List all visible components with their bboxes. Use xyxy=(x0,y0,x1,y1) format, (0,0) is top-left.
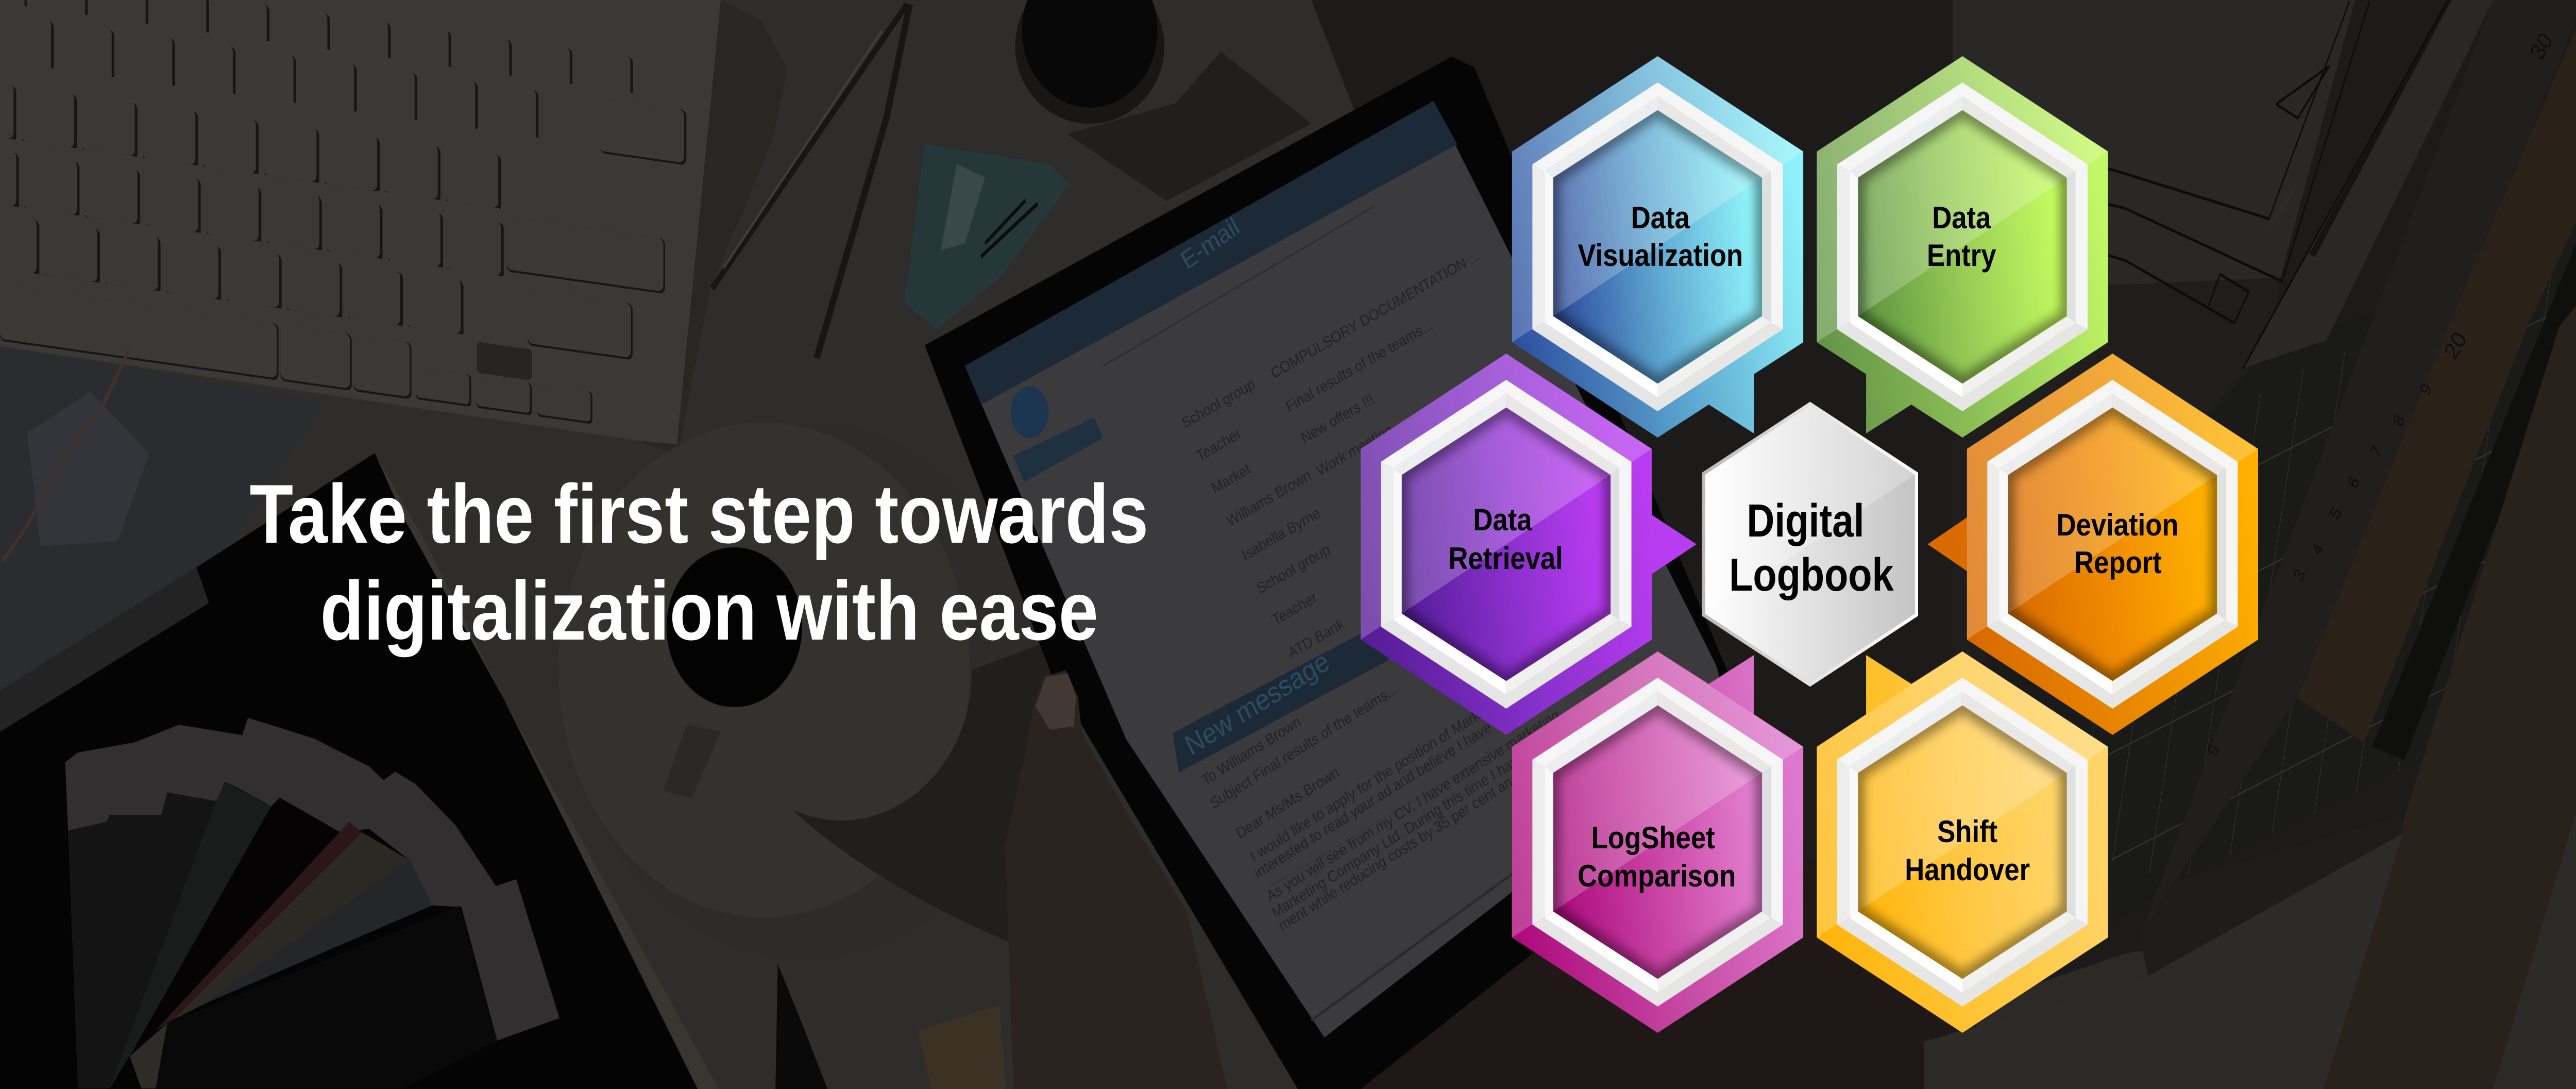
panel: logsheet comparison xyxy=(1512,651,1803,1033)
ruler numbers: 6 xyxy=(2344,473,2363,492)
hexagon body with tail xyxy=(1512,651,1803,1033)
inner shading xyxy=(1402,407,1611,681)
label xyxy=(1448,502,1563,576)
inner shading xyxy=(1553,705,1762,979)
label xyxy=(1578,200,1743,273)
tablet text: message body: I would like to apply for the position of Marketing Manager xyxy=(1247,658,1558,865)
gloss xyxy=(1705,406,1915,614)
inner face xyxy=(1858,110,2067,383)
tablet text: message body: As you will see from my CV, I have extensive marketing xyxy=(1264,706,1562,905)
tablet text: inbox rows: Teacher xyxy=(1194,424,1244,465)
gloss xyxy=(1817,651,2108,937)
ruler numbers: 20 xyxy=(2440,327,2471,364)
tablet text: message body: Subject Final results of the teams... xyxy=(1207,680,1400,812)
tablet text: inbox rows: School group xyxy=(1254,540,1332,597)
compass tool xyxy=(712,4,910,358)
tablet text: inbox rows: School group xyxy=(1179,375,1257,432)
crumpled paper xyxy=(904,144,1070,329)
ruler numbers: 8 xyxy=(2389,411,2409,430)
label: Visualization xyxy=(1578,238,1743,273)
tablet text: inbox rows: Market xyxy=(1209,460,1253,497)
label: Data xyxy=(1932,200,1991,235)
centre label: Logbook xyxy=(1729,548,1894,600)
tablet text: inbox rows: Teacher xyxy=(1269,588,1319,629)
face xyxy=(1705,406,1915,683)
black pot base xyxy=(1015,0,1311,201)
ruler numbers xyxy=(2204,28,2557,760)
label: Handover xyxy=(1905,852,2030,887)
ruler numbers: 9 xyxy=(2204,741,2223,760)
label: Report xyxy=(2074,545,2162,580)
hexagon body with arrow xyxy=(1927,354,2258,735)
white ring xyxy=(1532,678,1783,1007)
panel: digital logbook centre xyxy=(1702,402,1918,686)
label xyxy=(1927,200,1996,273)
ruler numbers: 30 xyxy=(2526,28,2557,65)
tablet text: inbox rows: COMPULSORY DOCUMENTATION ... xyxy=(1268,246,1482,382)
hexagon body with tail xyxy=(1512,56,1803,438)
inner face xyxy=(1858,705,2067,979)
tablet text: message body: Marketing Company Ltd. During this time I have improved xyxy=(1269,715,1579,922)
tablet text: inbox rows xyxy=(1179,246,1482,662)
tablet text: inbox rows: Williams Brown xyxy=(1224,466,1313,530)
tablet text: inbox rows: Work meeting xyxy=(1314,421,1395,479)
hexagon body with tail xyxy=(1817,651,2108,1033)
tablet text: message body xyxy=(1199,658,1579,934)
label xyxy=(1905,814,2030,887)
coffee cup and saucer xyxy=(558,423,1130,979)
inner shading xyxy=(2008,407,2217,681)
white ring xyxy=(1837,82,2088,411)
panel: data visualization xyxy=(1512,56,1803,438)
hand on tablet xyxy=(1005,670,1227,1089)
tablet text: message body: ment while reducing costs by 35 per cent and improved xyxy=(1276,735,1573,934)
gloss xyxy=(1512,56,1803,342)
centre label xyxy=(1729,494,1894,600)
ruler numbers: 7 xyxy=(2367,442,2386,461)
ruler numbers: 5 xyxy=(2326,504,2345,523)
plant paper xyxy=(0,346,324,732)
white ring xyxy=(1987,380,2238,709)
tablet text: inbox rows: Final results of the teams... xyxy=(1283,315,1435,415)
white ring xyxy=(1532,82,1783,411)
gloss xyxy=(1361,354,1652,640)
title: digitalization with ease xyxy=(320,564,1098,658)
title: Take the first step towards xyxy=(249,467,1148,561)
black notebook and leather strip xyxy=(0,453,719,1089)
label: Retrieval xyxy=(1448,541,1563,576)
tablet text: inbox rows: Isabella Byrne xyxy=(1239,504,1323,564)
label xyxy=(2057,508,2179,580)
tablet text: message body: To Williams Brown xyxy=(1199,712,1303,789)
ruler numbers: 4 xyxy=(2308,540,2327,559)
label xyxy=(1578,820,1736,893)
label: Shift xyxy=(1937,814,1997,849)
label: Deviation xyxy=(2057,508,2179,542)
white ring xyxy=(1837,678,2088,1007)
label: Data xyxy=(1631,200,1690,235)
label: Entry xyxy=(1927,238,1996,273)
bevel xyxy=(1702,402,1918,686)
inner face xyxy=(1553,705,1762,979)
tablet text: e-mail header: E-mail xyxy=(1176,211,1244,275)
tablet text: inbox rows: ATD Bank xyxy=(1285,614,1347,662)
inner shading xyxy=(1553,110,1762,383)
title xyxy=(249,467,1148,658)
colour swatches fan xyxy=(65,718,560,1088)
panel: data entry xyxy=(1817,56,2108,438)
inner face xyxy=(1402,407,1611,681)
gloss xyxy=(1967,354,2258,640)
label: LogSheet xyxy=(1591,820,1715,855)
inner shading xyxy=(1858,705,2067,979)
inner shading xyxy=(1858,110,2067,383)
ruler numbers: 9 xyxy=(2416,380,2435,399)
right-side papers, cutting mat, rulers xyxy=(1924,0,2576,1089)
tablet text: message body: Dear Ms/Ms Brown xyxy=(1233,763,1342,842)
gloss xyxy=(1817,56,2108,342)
hand holding the tablet (behind) xyxy=(1357,845,2283,1089)
label: Comparison xyxy=(1578,859,1736,893)
panel: data retrieval xyxy=(1361,354,1697,735)
tablet text: new message bar: New message xyxy=(1180,645,1334,762)
tablet xyxy=(925,57,1768,1089)
hexagon body with tail xyxy=(1817,56,2108,438)
keyboard xyxy=(0,0,787,454)
wooden ruler and pen on the desk xyxy=(775,964,1006,1089)
hexagon body with arrow xyxy=(1361,354,1697,735)
white ring xyxy=(1381,380,1632,709)
gloss xyxy=(1512,651,1803,937)
ruler numbers: 3 xyxy=(2290,566,2309,584)
tablet text: inbox rows: New offers !!! xyxy=(1298,390,1376,447)
panel: shift handover xyxy=(1817,651,2108,1033)
panel: deviation report xyxy=(1927,354,2258,735)
inner face xyxy=(1553,110,1762,383)
centre label: Digital xyxy=(1747,494,1865,546)
tablet text: message body: interested to read your ad and believe I have the skills and xyxy=(1251,673,1566,882)
inner face xyxy=(2008,407,2217,681)
label: Data xyxy=(1473,502,1532,537)
